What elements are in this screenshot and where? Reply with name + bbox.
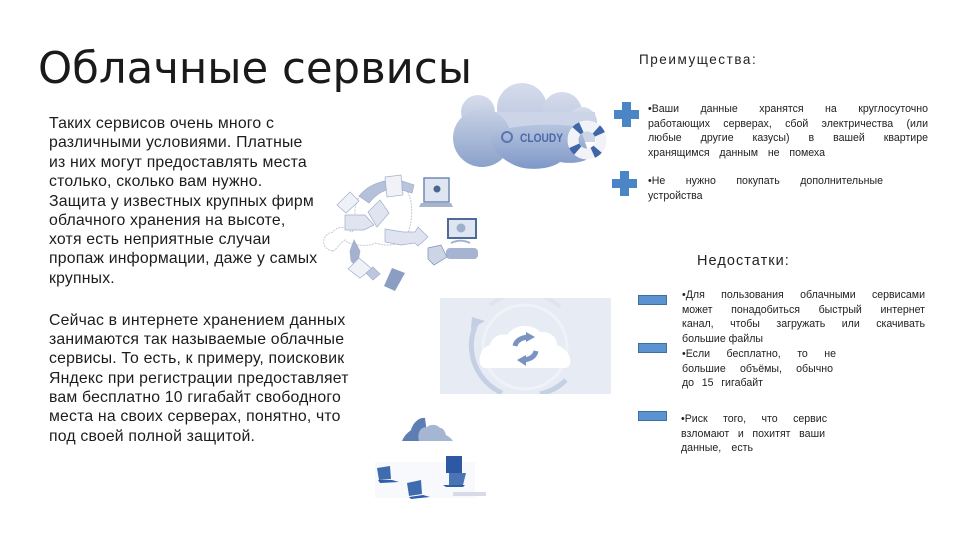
logo text: Cloudy: CLOUDY: [520, 131, 563, 145]
icon: minus 1: [638, 295, 667, 305]
text block: services intro: Таких сервисов очень много с: [49, 115, 274, 132]
text block: advantage 1: любые другие казусы) в вашей квартире: [648, 132, 928, 144]
text block: services intro: из них могут предоставлять места: [49, 154, 307, 171]
title: Облачные сервисы: [38, 44, 472, 94]
icon: minus 2: [638, 343, 667, 353]
text block: disadvantage 2: •Если бесплатно, то не: [682, 348, 836, 360]
text block: services intro: крупных.: [49, 270, 115, 287]
text block: advantage 1: хранящимся данным не помеха: [648, 146, 825, 158]
text block: disadvantage 1: большие файлы: [682, 332, 763, 344]
text block: services intro: хотя есть неприятные случаи: [49, 231, 271, 248]
text block: disadvantage 1: может понадобиться быстрый интернет: [682, 304, 925, 316]
icon: phone: [384, 268, 405, 291]
text block: cloud storage example: места на своих серверах, понятно, что: [49, 408, 341, 425]
text block: disadvantage 3: данные, есть: [681, 442, 753, 454]
text block: cloud storage example: сервисы. То есть, к примеру, поисковик: [49, 350, 344, 367]
icon: white cloud: [480, 326, 570, 368]
heading: advantages: Преимущества:: [639, 52, 757, 67]
icon: laptop: [419, 178, 453, 207]
text block: disadvantage 2: большие объёмы, обычно: [682, 362, 833, 374]
text block: services intro: облачного хранения на высоте,: [49, 212, 285, 229]
text block: disadvantage 3: [681, 413, 827, 454]
text block: cloud storage example: под своей полной защитой.: [49, 428, 255, 445]
text block: advantage 2: устройства: [648, 190, 703, 202]
heading: disadvantages: Недостатки:: [697, 253, 790, 269]
text block: cloud storage example: вам бесплатно 10 гигабайт свободного: [49, 389, 341, 406]
text block: disadvantage 2: до 15 гигабайт: [682, 377, 763, 389]
image: Cloudy cloud with lifebuoy: [453, 83, 606, 169]
icon: monitor: [428, 219, 478, 265]
text block: advantage 1: •Ваши данные хранятся на круглосуточно: [648, 103, 928, 115]
text block: cloud storage example: занимаются так называемые облачные: [49, 331, 344, 348]
text block: services intro: Защита у известных крупных фирм: [49, 193, 314, 210]
text block: disadvantage 3: •Риск того, что сервис: [681, 413, 827, 425]
text block: services intro: пропаж информации, даже у самых: [49, 250, 317, 267]
text block: disadvantage 3: взломают и похитят ваши: [681, 428, 825, 440]
image: devices around a cloud: [323, 174, 478, 291]
image: cloud sync panel: [440, 298, 611, 394]
icon: lifebuoy: [573, 126, 601, 154]
text block: advantage 2: [648, 175, 883, 202]
text block: advantage 2: •Не нужно покупать дополнительные: [648, 175, 883, 187]
text block: disadvantage 2: [682, 348, 836, 389]
image: cloud network with laptops: [377, 418, 486, 499]
text block: disadvantage 1: [682, 289, 925, 344]
icon: plus 1: [614, 102, 639, 127]
text block: cloud storage example: Сейчас в интернете хранением данных: [49, 312, 345, 329]
text block: services intro: [49, 115, 317, 287]
text block: advantage 1: [648, 103, 928, 158]
icon: minus 3: [638, 411, 667, 421]
text block: cloud storage example: [49, 312, 349, 445]
text block: disadvantage 1: канал, чтобы загружать или скачивать: [682, 318, 925, 330]
text block: services intro: столько, сколько вам нужно.: [49, 173, 262, 190]
text block: disadvantage 1: •Для пользования облачными сервисами: [682, 289, 925, 301]
text block: services intro: различными условиями. Платные: [49, 134, 303, 151]
text block: advantage 1: работающих серверах, сбой электричества (или: [648, 118, 928, 130]
icon: plus 2: [612, 171, 637, 196]
icon: sync arrows: [515, 337, 536, 360]
text block: cloud storage example: Яндекс при регистрации предоставляет: [49, 370, 349, 387]
